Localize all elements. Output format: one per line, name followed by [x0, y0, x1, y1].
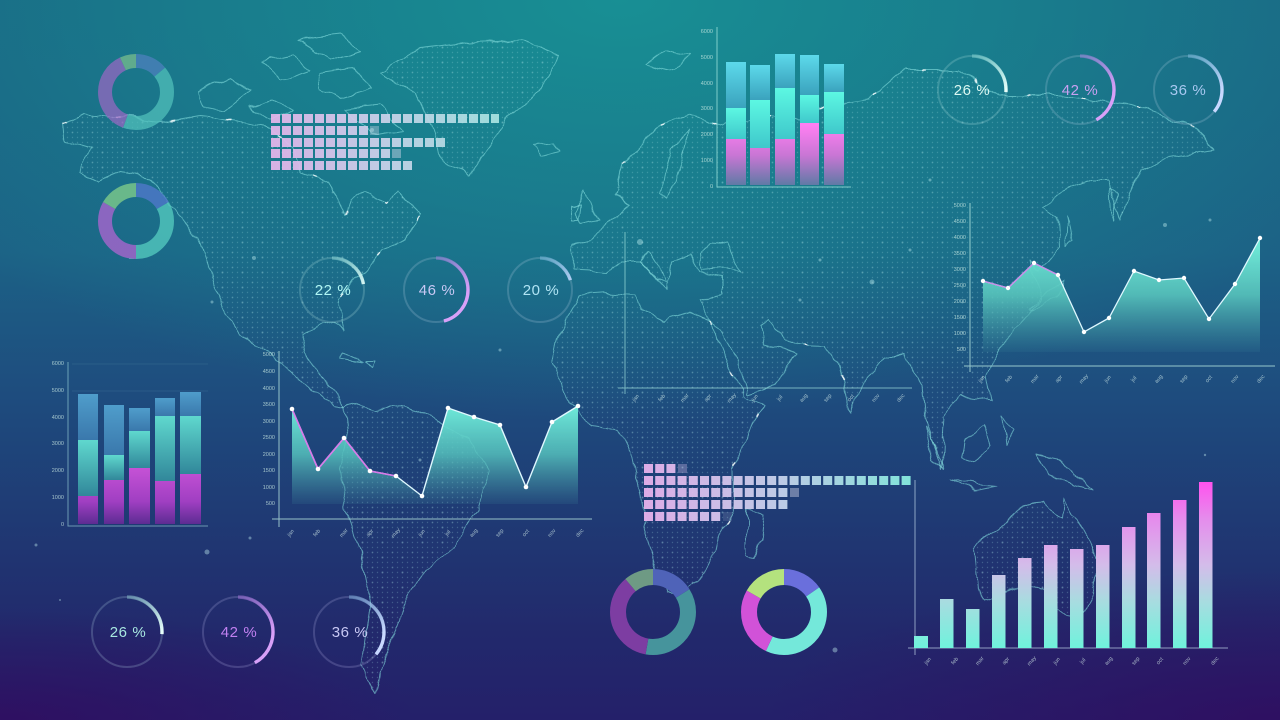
y labels: 4000 — [52, 415, 64, 421]
month labels: dec — [1210, 656, 1221, 667]
month labels: jun — [1103, 375, 1113, 385]
y labels — [701, 29, 713, 190]
gauge 36 percent — [314, 597, 384, 667]
month labels: mar — [339, 528, 350, 539]
month labels: apr — [1054, 374, 1064, 384]
y labels: 1000 — [954, 331, 966, 337]
y labels: 3000 — [52, 441, 64, 447]
y labels: 2500 — [954, 283, 966, 289]
month labels: jun — [417, 529, 427, 539]
y labels: 0 — [710, 184, 713, 190]
month labels: jan — [923, 657, 933, 667]
axes — [717, 27, 851, 187]
gridlines — [72, 364, 208, 391]
y labels: 6000 — [52, 361, 64, 367]
month labels: dec — [575, 528, 586, 539]
month labels: feb — [312, 528, 322, 538]
empty chart axes: centre — [618, 232, 912, 404]
y labels: 3000 — [263, 419, 275, 425]
data points — [290, 404, 580, 498]
y labels: 2000 — [701, 132, 713, 138]
y labels: 6000 — [701, 29, 713, 35]
month labels: nov — [1230, 374, 1241, 385]
month labels: jan — [977, 375, 987, 385]
month labels: may — [1027, 655, 1038, 667]
gauge 20 percent — [508, 258, 572, 322]
y labels: 1000 — [52, 495, 64, 501]
month labels: jan — [631, 394, 641, 404]
month labels: aug — [1154, 374, 1164, 385]
filled area — [292, 406, 578, 504]
month labels: feb — [950, 656, 960, 666]
month labels: jul — [1130, 375, 1138, 384]
month labels: nov — [547, 528, 558, 539]
y labels — [52, 361, 64, 528]
month labels: nov — [871, 393, 882, 404]
month labels: oct — [847, 393, 856, 403]
gauges: bottom left — [92, 597, 384, 667]
axes — [272, 351, 592, 527]
gauge 36 percent — [1154, 56, 1222, 124]
y labels: 500 — [957, 347, 966, 353]
square grid: north america — [271, 118, 499, 166]
gauge 22 percent — [300, 258, 364, 322]
y labels: 3500 — [263, 402, 275, 408]
bars — [726, 54, 844, 185]
pink line segment — [983, 263, 1058, 288]
gauge 26 percent — [938, 56, 1006, 124]
gauge 46 percent: 46 % — [419, 282, 455, 299]
gauge 42 percent: 42 % — [221, 624, 257, 641]
y labels: 4000 — [954, 235, 966, 241]
pink line segment — [292, 409, 396, 476]
filled area — [983, 238, 1260, 352]
line — [983, 238, 1260, 332]
month labels: mar — [975, 656, 986, 667]
gauges: middle — [300, 258, 572, 322]
bar chart: bottom right — [908, 480, 1228, 667]
y labels: 2000 — [52, 468, 64, 474]
month labels: feb — [657, 393, 667, 403]
y labels: 1500 — [263, 468, 275, 474]
y labels: 3000 — [954, 267, 966, 273]
y labels: 4500 — [954, 219, 966, 225]
y labels: 2000 — [263, 452, 275, 458]
month labels — [977, 373, 1267, 385]
gauge 46 percent — [404, 258, 468, 322]
y labels: 4500 — [263, 369, 275, 375]
scattered data points on map — [34, 128, 1212, 652]
month labels: apr — [1001, 656, 1011, 666]
gauge 36 percent: 36 % — [1170, 82, 1206, 99]
y labels: 2000 — [954, 299, 966, 305]
month labels: oct — [1156, 656, 1165, 666]
donut: top-left muted — [105, 61, 167, 123]
gauge 42 percent — [1046, 56, 1114, 124]
month labels: apr — [365, 528, 375, 538]
y labels: 3500 — [954, 251, 966, 257]
month labels: sep — [495, 528, 505, 539]
y labels: 5000 — [52, 388, 64, 394]
donut: left second — [105, 190, 167, 252]
y labels — [263, 352, 275, 507]
axes — [964, 203, 1275, 372]
month labels: may — [727, 392, 738, 404]
coastline highlights — [62, 70, 1215, 537]
y labels: 1000 — [263, 485, 275, 491]
axes — [908, 480, 1228, 655]
y labels — [954, 203, 966, 353]
line — [292, 406, 578, 496]
month labels: jul — [1079, 657, 1087, 666]
gauge 42 percent: 42 % — [1062, 82, 1098, 99]
month labels: apr — [703, 393, 713, 403]
month labels — [923, 655, 1221, 667]
stacked bar chart: top centre — [701, 27, 851, 190]
month labels: aug — [799, 393, 809, 404]
gauge 26 percent: 26 % — [954, 82, 990, 99]
y labels: 0 — [61, 522, 64, 528]
axes — [618, 232, 912, 394]
gauge 36 percent: 36 % — [332, 624, 368, 641]
month labels: mar — [680, 393, 691, 404]
month labels: sep — [1179, 374, 1189, 385]
month labels: jun — [1052, 657, 1062, 667]
month labels: may — [391, 527, 402, 539]
data points — [981, 236, 1262, 334]
y labels: 1500 — [954, 315, 966, 321]
stacked bar chart: left — [52, 361, 208, 528]
donut: bottom centre muted — [618, 577, 688, 647]
month labels: oct — [1205, 374, 1214, 384]
bars — [914, 482, 1212, 648]
y labels: 4000 — [701, 81, 713, 87]
y labels: 5000 — [701, 55, 713, 61]
area chart: right — [954, 203, 1275, 385]
y labels: 1000 — [701, 158, 713, 164]
gauge 22 percent: 22 % — [315, 282, 351, 299]
y labels: 2500 — [263, 435, 275, 441]
month labels — [631, 392, 907, 404]
month labels: jul — [444, 529, 452, 538]
y labels: 4000 — [263, 386, 275, 392]
month labels: sep — [1131, 656, 1141, 667]
month labels: nov — [1182, 656, 1193, 667]
month labels: dec — [1256, 374, 1267, 385]
month labels: aug — [469, 528, 479, 539]
month labels: sep — [823, 393, 833, 404]
month labels: jul — [776, 394, 784, 403]
month labels: aug — [1104, 656, 1114, 667]
gauge 42 percent — [203, 597, 273, 667]
y labels: 5000 — [263, 352, 275, 358]
donut: bottom centre bright — [749, 577, 819, 647]
y labels: 3000 — [701, 106, 713, 112]
gauge 20 percent: 20 % — [523, 282, 559, 299]
gauge 26 percent — [92, 597, 162, 667]
month labels: jun — [750, 394, 760, 404]
axes — [68, 362, 208, 526]
area chart: centre-left — [263, 351, 592, 539]
month labels — [286, 527, 586, 539]
month labels: dec — [896, 393, 907, 404]
month labels: mar — [1030, 374, 1041, 385]
gauges: top right — [938, 56, 1222, 124]
month labels: oct — [522, 528, 531, 538]
month labels: jan — [286, 529, 296, 539]
bars — [78, 392, 201, 524]
gauge 26 percent: 26 % — [110, 624, 146, 641]
square grid: africa — [644, 464, 912, 521]
month labels: feb — [1004, 374, 1014, 384]
month labels: may — [1079, 373, 1090, 385]
y labels: 5000 — [954, 203, 966, 209]
y labels: 500 — [266, 501, 275, 507]
